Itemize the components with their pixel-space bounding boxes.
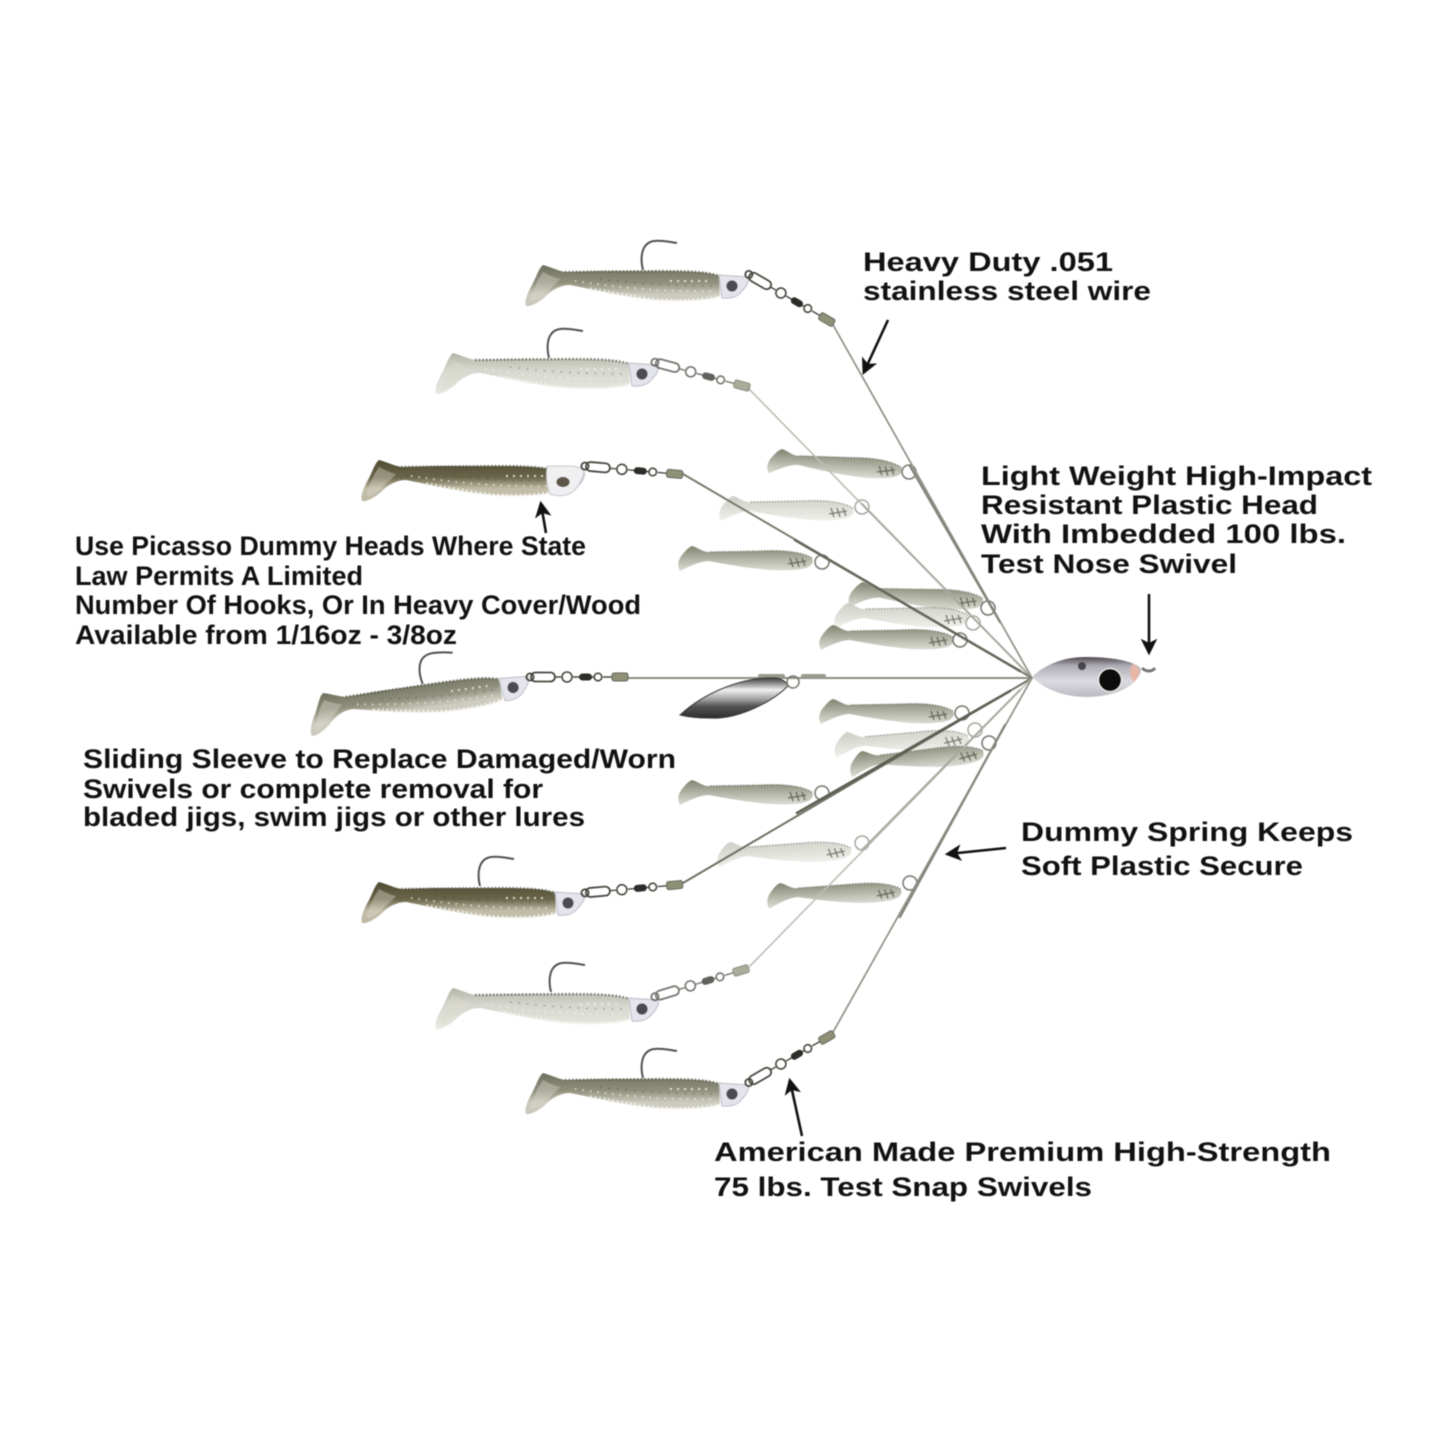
- lure 4: centre: [306, 650, 628, 736]
- lure 3: dark, dummy head: [361, 460, 683, 501]
- stainless steel wire arms: [628, 323, 1032, 1034]
- label: plastic head: With Imbedded 100 lbs.: [981, 519, 1346, 549]
- dummy attachment rings: [815, 465, 996, 890]
- label: dummy spring: Dummy Spring Keeps: [1021, 817, 1353, 847]
- label: sliding sleeve: Sliding Sleeve to Replace Damaged/Worn: [83, 744, 676, 774]
- arrow: dummy spring: [948, 848, 1006, 854]
- label: dummy heads: [75, 531, 641, 650]
- arrow: nose swivel: [1148, 594, 1150, 652]
- lure 5: dark lower: [361, 857, 683, 923]
- label: snap swivels: American Made Premium High-Strength: [714, 1137, 1331, 1167]
- arrow: snap swivel: [790, 1081, 802, 1136]
- label: dummy spring: Soft Plastic Secure: [1021, 851, 1303, 881]
- label: sliding sleeve: Swivels or complete removal for: [83, 774, 544, 804]
- plastic rig head: [1032, 657, 1155, 697]
- label: dummy spring: [1021, 817, 1353, 881]
- lure 6: [435, 963, 750, 1029]
- dummy fish on upper arms: [678, 448, 984, 650]
- dummy fish on lower arms: [678, 699, 985, 909]
- lure 2: [435, 329, 751, 394]
- label: sliding sleeve: bladed jigs, swim jigs or other lures: [83, 802, 585, 832]
- label: plastic head: [981, 461, 1372, 579]
- arrow: wire: [864, 320, 888, 372]
- label: plastic head: Light Weight High-Impact: [981, 461, 1372, 491]
- label: dummy heads: Number Of Hooks, Or In Heavy Cover/Wood: [75, 590, 641, 620]
- label: plastic head: Resistant Plastic Head: [981, 490, 1318, 520]
- label: sliding sleeve: [83, 744, 676, 832]
- label: dummy heads: Use Picasso Dummy Heads Where State: [75, 531, 586, 561]
- lure 1: top: [525, 241, 836, 328]
- label: snap swivels: 75 lbs. Test Snap Swivels: [714, 1172, 1092, 1202]
- label: wire: [863, 247, 1151, 306]
- lure 7: bottom: [525, 1029, 836, 1114]
- label: dummy heads: Law Permits A Limited: [75, 561, 363, 591]
- label: wire: Heavy Duty .051: [863, 247, 1113, 277]
- label: dummy heads: Available from 1/16oz - 3/8oz: [75, 620, 457, 650]
- label: snap swivels: [714, 1137, 1331, 1202]
- willow blade: [680, 676, 799, 718]
- label: plastic head: Test Nose Swivel: [981, 549, 1237, 579]
- arrow: dummy head: [541, 504, 546, 533]
- label: wire: stainless steel wire: [863, 276, 1151, 306]
